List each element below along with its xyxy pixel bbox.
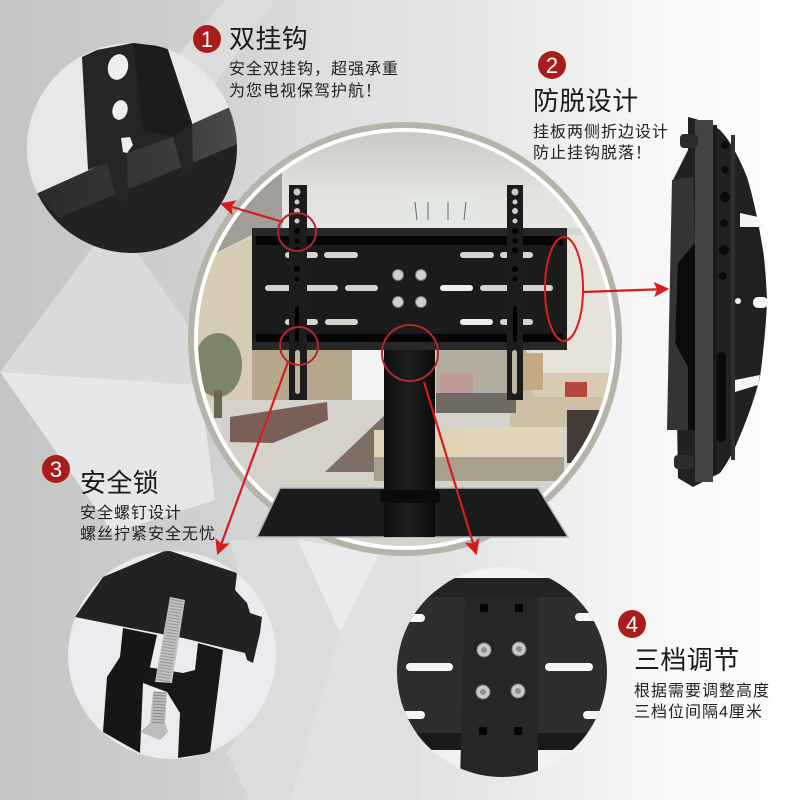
callout 3: 安全锁 <box>80 468 159 498</box>
central product photo circle <box>188 122 630 556</box>
TV stand product <box>252 185 568 537</box>
vertical strip right <box>507 185 523 400</box>
callout 1: 1 <box>201 27 213 52</box>
red highlight circles <box>278 213 583 381</box>
detail 1 circle: double hook <box>27 43 237 253</box>
red arrows <box>218 204 667 553</box>
callout 1: 为您电视保驾护航！ <box>229 82 382 100</box>
callout 2: 防脱设计 <box>533 86 639 116</box>
callout 4: 根据需要调整高度 <box>634 682 770 700</box>
callout 2: 挂板两侧折边设计 <box>533 123 669 141</box>
callout 1: 安全双挂钩，超强承重 <box>229 60 399 78</box>
callout 4 <box>618 610 770 721</box>
callout 3 <box>42 455 216 543</box>
callout 4: 三档调节 <box>634 645 740 675</box>
callout 2: 2 <box>546 53 558 78</box>
callout 3: 螺丝拧紧安全无忧 <box>80 525 216 543</box>
callout 4: 4 <box>626 612 638 637</box>
column <box>380 350 440 537</box>
vertical strip left <box>289 185 307 400</box>
room interior <box>190 125 630 550</box>
callout 2 <box>533 51 669 162</box>
detail 4 circle: height adjustment <box>395 567 613 780</box>
callout 2: 防止挂钩脱落！ <box>533 144 652 162</box>
callout 4: 三档位间隔4厘米 <box>634 703 763 721</box>
callout 3: 3 <box>50 457 62 482</box>
glass base <box>257 488 568 537</box>
callout 3: 安全螺钉设计 <box>80 504 182 522</box>
detail 2: anti-detach edge half circle <box>667 117 768 487</box>
mounting plate <box>252 228 567 350</box>
callout 1: 双挂钩 <box>229 24 308 54</box>
callout 1 <box>193 24 399 100</box>
detail 3 circle: safety screw <box>68 550 276 759</box>
